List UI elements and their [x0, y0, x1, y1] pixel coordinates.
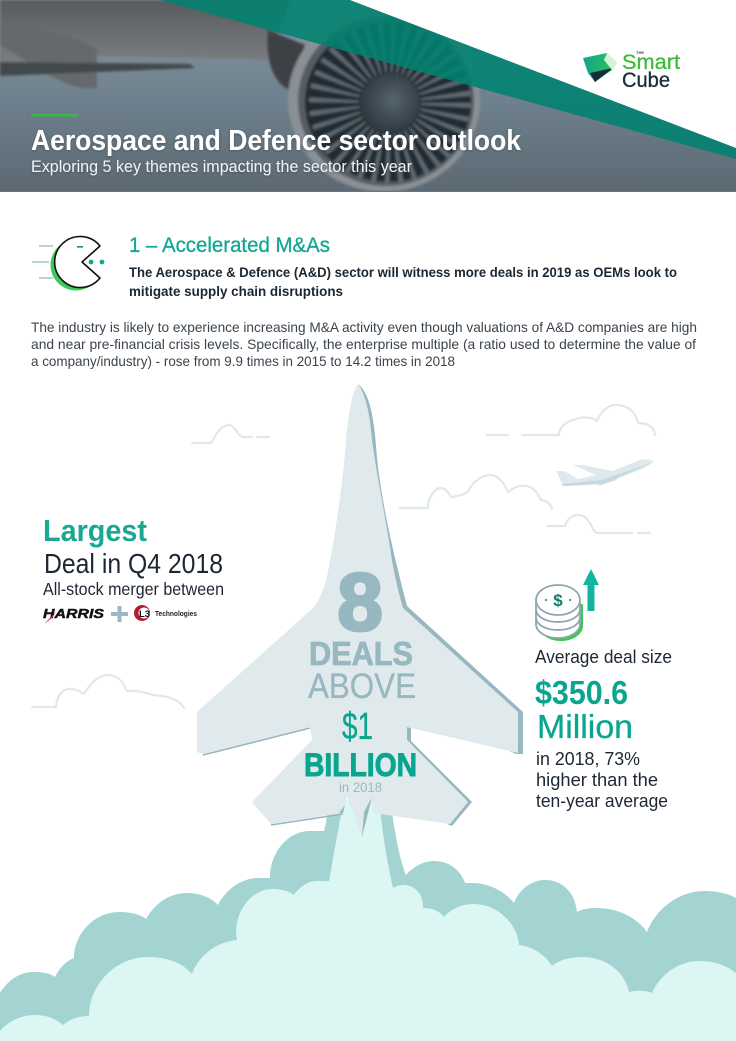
- right callout: average deal size: [535, 647, 672, 811]
- logo: Harris: HARRIS: [43, 607, 105, 621]
- icon: pacman: [32, 237, 105, 290]
- right callout: average deal size: higher than the: [536, 770, 658, 790]
- right callout: average deal size: Average deal size: [535, 647, 672, 667]
- smoke cloud: front layer: [0, 800, 736, 1041]
- icon: coin stack with up arrow: $: [553, 591, 563, 610]
- logo: The Smart Cube: [583, 50, 680, 92]
- jet text: 8: 8: [337, 557, 383, 648]
- right callout: average deal size: Million: [537, 708, 633, 745]
- logo: L3 Technologies: [134, 605, 197, 621]
- section subheading: [129, 264, 677, 299]
- logo: L3 Technologies: Technologies: [155, 609, 197, 618]
- jet tail nozzle highlights: [339, 797, 372, 837]
- logo: The Smart Cube: Cube: [622, 69, 670, 92]
- jet body: [197, 384, 518, 837]
- jet text: deals: DEALS: [309, 635, 413, 672]
- teal diagonal band: [160, 0, 736, 159]
- icon: airliner: [556, 459, 654, 486]
- left callout: largest deal: Largest: [43, 513, 147, 548]
- white corner: [350, 0, 736, 148]
- logo: The Smart Cube: Smart: [622, 51, 680, 74]
- left callout: largest deal: [43, 513, 224, 624]
- jet shadow edges: [358, 384, 523, 754]
- logo: L3 Technologies: L3: [139, 609, 150, 620]
- body paragraph: The industry is likely to experience increasing M&A activity even though valuations of A&D companies are high: [31, 319, 697, 335]
- logo: The Smart Cube: THE: [636, 50, 644, 55]
- subtitle: Exploring 5 key themes impacting the sector this year: [31, 157, 412, 176]
- right callout: average deal size: in 2018, 73%: [536, 749, 640, 769]
- fighter jet illustration: [197, 384, 523, 837]
- plus sign: [111, 606, 128, 622]
- body paragraph: a company/industry) - rose from 9.9 times in 2015 to 14.2 times in 2018: [31, 353, 455, 369]
- logo: Harris: [43, 607, 105, 624]
- title: Aerospace and Defence sector outlook: [31, 125, 522, 157]
- body paragraph: [31, 319, 697, 369]
- background clouds: [32, 405, 655, 708]
- section subheading: mitigate supply chain disruptions: [129, 283, 343, 299]
- header photo banner: [0, 0, 736, 192]
- section heading: 1 – Accelerated M&As: [129, 234, 330, 257]
- right callout: average deal size: ten-year average: [536, 791, 668, 811]
- body paragraph: and near pre-financial crisis levels. Specifically, the enterprise multiple (a ratio used to determine the value of: [31, 336, 696, 352]
- icon: coin stack with up arrow: [536, 569, 599, 641]
- jet text: above: ABOVE: [308, 667, 416, 706]
- jet text: $1: $1: [342, 706, 373, 748]
- left callout: largest deal: Deal in Q4 2018: [44, 548, 223, 579]
- green accent rule: [31, 114, 78, 116]
- section subheading: The Aerospace & Defence (A&D) sector will witness more deals in 2019 as OEMs look to: [129, 264, 677, 280]
- jet text: in 2018: in 2018: [339, 780, 382, 795]
- arrow up: [583, 569, 599, 611]
- smoke cloud: back layer: [0, 800, 736, 1041]
- right callout: average deal size: $350.6: [535, 674, 628, 711]
- jet text: billion: BILLION: [304, 747, 417, 783]
- left callout: largest deal: All-stock merger between: [43, 579, 224, 599]
